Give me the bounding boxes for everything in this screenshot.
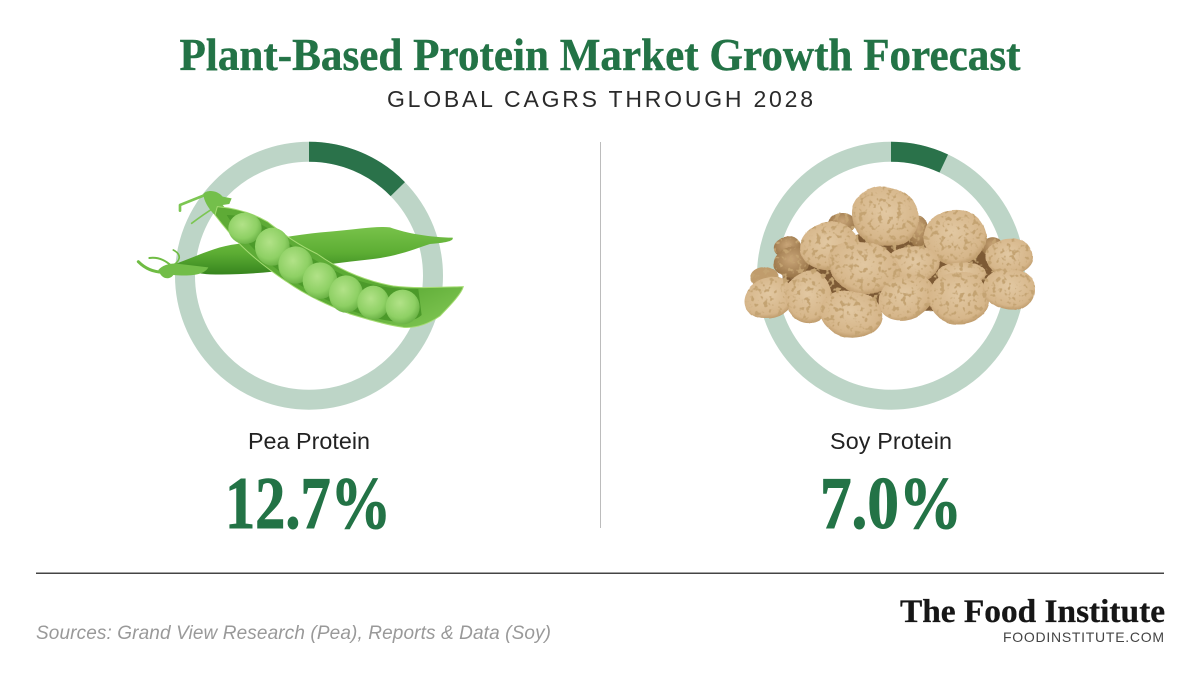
title: Plant-Based Protein Market Growth Forecast (180, 29, 1021, 80)
logo: The Food Institute (900, 594, 1165, 645)
back pod calyx (158, 264, 208, 278)
logo wordmark: The Food Institute (900, 594, 1165, 630)
front pod inner cavity (227, 215, 422, 321)
panel: soy protein (739, 152, 1039, 545)
back pod (175, 227, 453, 274)
icon: soy chunks (739, 176, 1039, 340)
label: soy protein: Soy Protein (830, 428, 952, 454)
icon: pea pods (138, 191, 463, 327)
donut chart: soy protein 7.0% (767, 152, 1015, 400)
shadowed base between chunks (782, 232, 1008, 313)
label: pea protein: Pea Protein (248, 428, 370, 454)
sources: Sources: Grand View Research (Pea), Reports & Data (Soy) (36, 623, 551, 644)
logo url: FOODINSTITUTE.COM (1003, 629, 1164, 645)
divider (600, 142, 601, 528)
front pod stem (180, 195, 213, 223)
value: 12.7%: 12.7% (225, 463, 391, 545)
back pod stem (138, 250, 179, 272)
peas (228, 213, 420, 324)
panel: pea protein (138, 152, 463, 545)
value: 7.0%: 7.0% (820, 463, 962, 545)
subtitle: GLOBAL CAGRS THROUGH 2028 (387, 86, 813, 112)
donut chart: pea protein 12.7% (185, 152, 433, 400)
front pod shell (215, 207, 463, 327)
footer rule (36, 572, 1164, 574)
